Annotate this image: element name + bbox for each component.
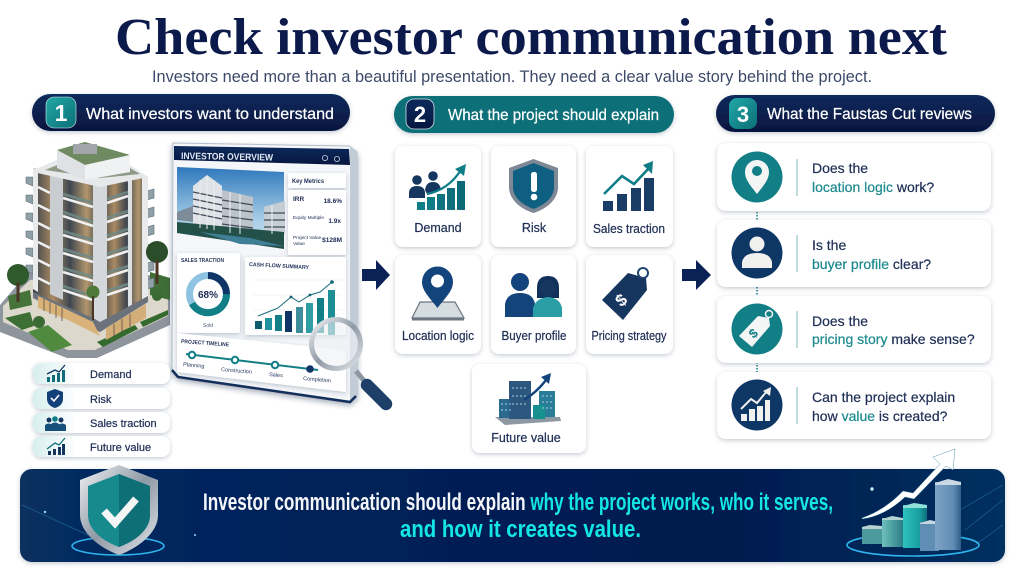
key metrics card: $128M [322, 237, 342, 244]
card: future value [472, 364, 586, 453]
key metrics card [288, 173, 346, 255]
banner: key takeaway [20, 449, 1005, 562]
card: sales traction [586, 146, 673, 247]
icon: sales traction [603, 161, 654, 211]
key metrics card: Key Metrics [292, 178, 324, 185]
icon: demand [409, 164, 466, 210]
legend item: risk: Risk [90, 394, 112, 406]
card: value creation question: how value is created? [812, 408, 948, 424]
legend: investor topics [33, 363, 170, 457]
project timeline: Planning [183, 362, 205, 370]
cash flow chart [245, 257, 346, 335]
card: pricing story question: $ [746, 325, 761, 341]
section 3 header pill: What the Faustas Cut reviews [767, 106, 972, 123]
building illustration [0, 142, 170, 358]
dashboard header [174, 146, 350, 165]
card: risk [491, 146, 576, 247]
card: sales traction: Sales traction [593, 222, 665, 236]
takeaway text: and how it creates value. [400, 516, 641, 543]
icon: rising bar chart [847, 449, 979, 556]
sales traction donut: 68% [198, 290, 218, 301]
card: buyer profile [491, 255, 576, 354]
subtitle: Investors need more than a beautiful presentation. They need a clear value story behind the project. [152, 68, 872, 86]
card: buyer profile question: Is the [812, 237, 846, 253]
dashboard photo [177, 167, 285, 249]
icon: location pin [412, 266, 464, 320]
project timeline [177, 333, 346, 392]
card: future value: Future value [491, 431, 561, 445]
takeaway text: Investor communication should explain why the project works, who it serves, [203, 489, 833, 516]
key metrics card: 1.9x [328, 218, 341, 225]
card: risk: Risk [522, 221, 547, 235]
sales traction donut: SALES TRACTION [181, 258, 224, 264]
key metrics card: 18.6% [324, 198, 342, 205]
card: value creation question [717, 372, 991, 439]
section 2 header pill: What the project should explain [448, 107, 659, 124]
section 1 header pill [32, 94, 350, 131]
card: location logic [395, 255, 481, 354]
key metrics card: IRR [293, 196, 304, 203]
card: pricing story question [717, 296, 991, 363]
icon: future value buildings [495, 373, 561, 425]
dashboard header: INVESTOR OVERVIEW [181, 151, 273, 164]
card: buyer profile question [717, 220, 991, 287]
card: demand: Demand [414, 221, 462, 235]
project timeline: Completion [303, 376, 331, 384]
icon: buyer profile people [505, 273, 562, 317]
panel: investor overview dashboard [172, 143, 357, 402]
section 3 header pill [716, 95, 995, 132]
card: buyer profile: Buyer profile [502, 329, 567, 343]
card: location logic question: Does the [812, 160, 868, 176]
project timeline: Sales [269, 372, 283, 379]
section 3 header pill: 3 [737, 102, 749, 127]
card: pricing strategy: Pricing strategy [592, 329, 667, 343]
icon: shield with checkmark [72, 465, 164, 555]
arrow: section 1 to 2 [362, 260, 390, 290]
section 1 header pill: What investors want to understand [86, 106, 334, 123]
arrow: section 2 to 3 [682, 260, 711, 290]
title: Check investor communication next [115, 9, 948, 66]
takeaway text [203, 489, 833, 543]
far balconies [26, 177, 154, 290]
sales traction donut [177, 253, 240, 333]
connector: dotted line between review icons [756, 200, 758, 385]
icon: price tag: $ [612, 290, 631, 311]
key metrics card: Equity Multiple [293, 215, 324, 221]
card: location logic: Location logic [402, 329, 474, 343]
card: value creation question: Can the project explain [812, 389, 955, 405]
sales traction donut: Sold [203, 323, 213, 329]
legend item: sales traction: Sales traction [90, 418, 157, 430]
project timeline: PROJECT TIMELINE [181, 339, 229, 348]
card: pricing strategy [586, 255, 673, 354]
project timeline: Construction [221, 367, 252, 376]
legend item: demand: Demand [90, 369, 132, 381]
card: pricing story question: Does the [812, 313, 868, 329]
section 1 header pill: 1 [55, 100, 68, 126]
card: location logic question: location logic work? [812, 179, 934, 195]
icon: magnifying glass [312, 320, 386, 404]
cash flow chart: CASH FLOW SUMMARY [249, 262, 309, 271]
section 2 header pill: 2 [414, 102, 426, 127]
card: location logic question [717, 143, 991, 211]
icon: risk shield [509, 159, 558, 213]
card: demand [395, 146, 481, 247]
key metrics card: Project Value [293, 235, 322, 241]
section 2 header pill [394, 96, 674, 133]
card: pricing story question: pricing story make sense? [812, 331, 975, 347]
card: buyer profile question: buyer profile clear? [812, 256, 931, 272]
key metrics card: Value [293, 241, 305, 247]
legend item: future value: Future value [90, 442, 151, 454]
